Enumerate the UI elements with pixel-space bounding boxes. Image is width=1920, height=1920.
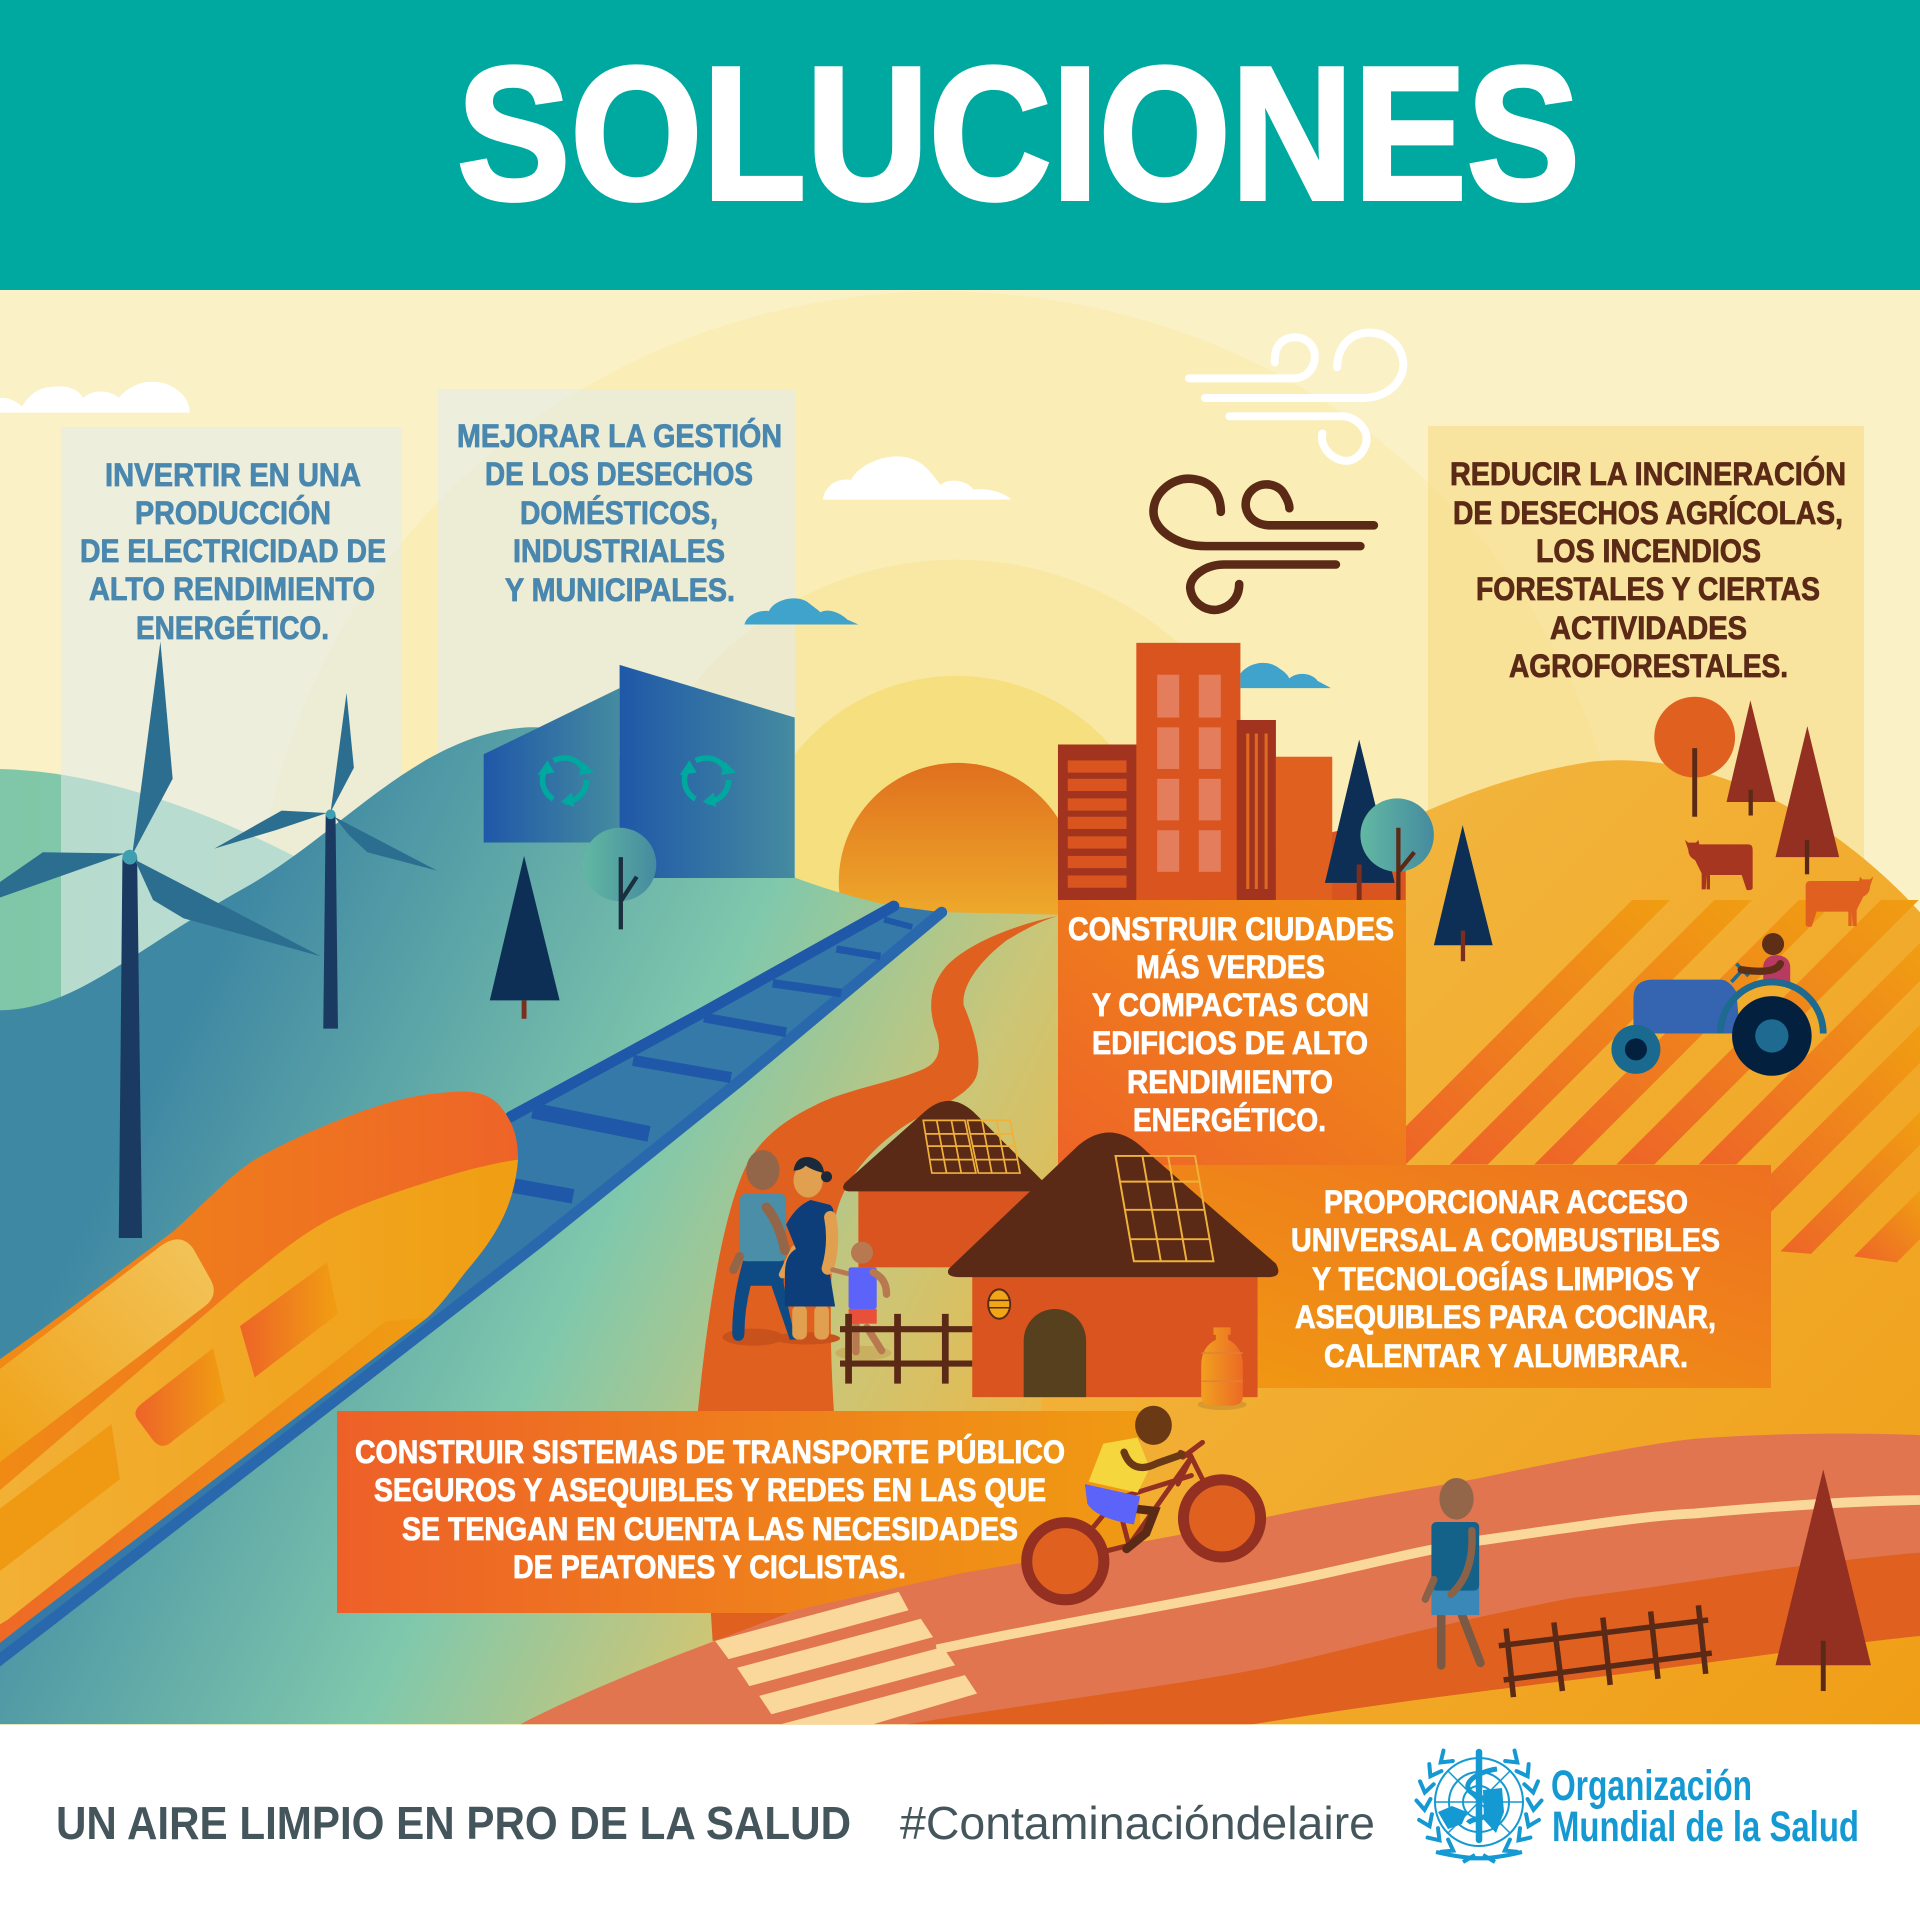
text: electricity production: ENERGÉTICO. xyxy=(136,610,329,646)
door xyxy=(1024,1309,1086,1397)
text: agricultural burning: REDUCIR LA INCINERACIÓN xyxy=(1450,456,1846,492)
background hills and sun xyxy=(402,292,1428,945)
crosswalk xyxy=(715,1592,977,1729)
sun xyxy=(838,762,1058,915)
text: public transport: SE TENGAN EN CUENTA LAS NECESIDADES xyxy=(402,1511,1018,1547)
tractor xyxy=(1611,933,1823,1076)
icon: cow brown xyxy=(1685,840,1753,890)
text: waste management: INDUSTRIALES xyxy=(513,533,725,569)
recycling building xyxy=(484,665,795,878)
solar panel front house xyxy=(1116,1156,1213,1261)
text: agricultural burning: AGROFORESTALES. xyxy=(1509,648,1788,684)
window xyxy=(988,1289,1010,1319)
city buildings xyxy=(1058,643,1406,901)
text: greener cities: RENDIMIENTO xyxy=(1127,1064,1333,1100)
WHO name: Organización xyxy=(1551,1762,1752,1810)
text: waste management: DOMÉSTICOS, xyxy=(520,495,718,531)
field stripes xyxy=(1406,900,1920,1262)
wreath right xyxy=(1501,1751,1541,1857)
text: public transport xyxy=(355,1434,1065,1585)
text: clean energy access: Y TECNOLOGÍAS LIMPIOS Y xyxy=(1312,1261,1700,1297)
text: agricultural burning: DE DESECHOS AGRÍCOLAS, xyxy=(1453,495,1843,531)
text: greener cities xyxy=(1068,911,1394,1138)
text: greener cities: MÁS VERDES xyxy=(1136,949,1325,985)
footer slogan: UN AIRE LIMPIO EN PRO DE LA SALUD xyxy=(56,1797,851,1849)
text: greener cities: Y COMPACTAS CON xyxy=(1092,987,1369,1023)
icon: blue cloud xyxy=(744,598,858,624)
cyclist xyxy=(1027,1406,1261,1600)
rail track xyxy=(0,906,942,1669)
fence near house xyxy=(840,1314,972,1384)
text: waste management xyxy=(457,418,782,608)
text: waste management: Y MUNICIPALES. xyxy=(505,572,735,608)
panel: greener cities xyxy=(1058,900,1406,1165)
fence on road xyxy=(1499,1605,1712,1697)
icon: WHO emblem xyxy=(1417,1751,1541,1862)
solar panels back house xyxy=(923,1120,1020,1173)
text: greener cities: ENERGÉTICO. xyxy=(1133,1102,1326,1138)
title: SOLUCIONES xyxy=(457,28,1580,240)
panel: public transport xyxy=(337,1411,1140,1613)
text: clean energy access: PROPORCIONAR ACCESO xyxy=(1324,1184,1688,1220)
text: agricultural burning: ACTIVIDADES xyxy=(1550,610,1747,646)
walker xyxy=(1425,1478,1480,1665)
text: electricity production: DE ELECTRICIDAD DE xyxy=(80,533,386,569)
footer hashtag: #Contaminacióndelaire xyxy=(900,1797,1375,1849)
back house xyxy=(843,1101,1053,1267)
icon: white cloud left xyxy=(0,382,190,413)
long train window xyxy=(0,1239,214,1462)
tree: red pine large xyxy=(1776,726,1839,874)
icon: recycle left xyxy=(538,758,594,807)
text: electricity production: INVERTIR EN UNA xyxy=(105,457,361,493)
text: electricity production: ALTO RENDIMIENTO xyxy=(89,571,375,607)
wreath left xyxy=(1417,1751,1457,1857)
icon: white wind xyxy=(1189,333,1403,461)
wind turbine small xyxy=(214,693,437,1029)
panel: agricultural burning xyxy=(1428,426,1864,886)
tree: red pine by road xyxy=(1776,1469,1871,1691)
header band xyxy=(0,0,1920,290)
wind turbine large xyxy=(0,642,321,1238)
green main hill xyxy=(0,727,1102,1724)
child xyxy=(849,1242,887,1352)
text: waste management: MEJORAR LA GESTIÓN xyxy=(457,418,782,454)
tree: round in city xyxy=(1360,798,1434,902)
sky background xyxy=(0,290,1920,1726)
text: waste management: DE LOS DESECHOS xyxy=(485,456,753,492)
icon: blue cloud by city xyxy=(1240,663,1331,688)
road centre line xyxy=(937,1500,1920,1649)
train windows xyxy=(240,1262,338,1378)
text: clean energy access: UNIVERSAL A COMBUSTIBLES xyxy=(1291,1222,1720,1258)
family xyxy=(722,1150,891,1360)
footer band xyxy=(0,1725,1920,1920)
text: public transport: CONSTRUIR SISTEMAS DE TRANSPORTE PÚBLICO xyxy=(355,1434,1065,1470)
tree: round orange xyxy=(1654,697,1735,817)
panel: clean energy access xyxy=(1150,1165,1771,1388)
front house xyxy=(948,1133,1278,1397)
road xyxy=(520,1434,1920,1729)
icon: recycle right xyxy=(680,758,736,807)
text: public transport: DE PEATONES Y CICLISTAS. xyxy=(513,1549,906,1585)
text: greener cities: CONSTRUIR CIUDADES xyxy=(1068,911,1394,947)
text: clean energy access xyxy=(1291,1184,1720,1374)
text: clean energy access: CALENTAR Y ALUMBRAR. xyxy=(1324,1338,1688,1374)
tractor driver xyxy=(1731,933,1790,983)
icon: cow orange xyxy=(1806,877,1873,927)
text: agricultural burning: FORESTALES Y CIERTAS xyxy=(1476,571,1820,607)
panel: electricity production xyxy=(61,427,402,997)
train xyxy=(0,1091,518,1671)
woman xyxy=(782,1157,847,1340)
panel: waste management xyxy=(438,389,795,889)
tree: red pine small xyxy=(1727,700,1776,816)
WHO name xyxy=(1551,1762,1859,1851)
tree: pine near recycling xyxy=(490,856,560,1019)
icon: brown wind xyxy=(1153,479,1374,610)
text: agricultural burning xyxy=(1450,456,1846,684)
tree: round near recycling xyxy=(583,828,656,929)
orange hill right xyxy=(967,760,1920,1724)
text: public transport: SEGUROS Y ASEQUIBLES Y REDES EN LAS QUE xyxy=(374,1472,1046,1508)
icon: gas cylinder xyxy=(1198,1327,1247,1410)
text: agricultural burning: LOS INCENDIOS xyxy=(1536,533,1761,569)
text: greener cities: EDIFICIOS DE ALTO xyxy=(1092,1025,1368,1061)
pale green hill xyxy=(0,769,331,1102)
text: clean energy access: ASEQUIBLES PARA COCINAR, xyxy=(1295,1299,1716,1335)
tree: pine in city xyxy=(1325,740,1395,901)
tree: pine right of city xyxy=(1434,825,1493,961)
icon: white cloud centre xyxy=(823,456,1011,500)
orange path xyxy=(698,916,1058,1641)
man xyxy=(732,1150,796,1341)
text: electricity production: PRODUCCIÓN xyxy=(135,495,331,531)
text: electricity production xyxy=(80,457,386,646)
